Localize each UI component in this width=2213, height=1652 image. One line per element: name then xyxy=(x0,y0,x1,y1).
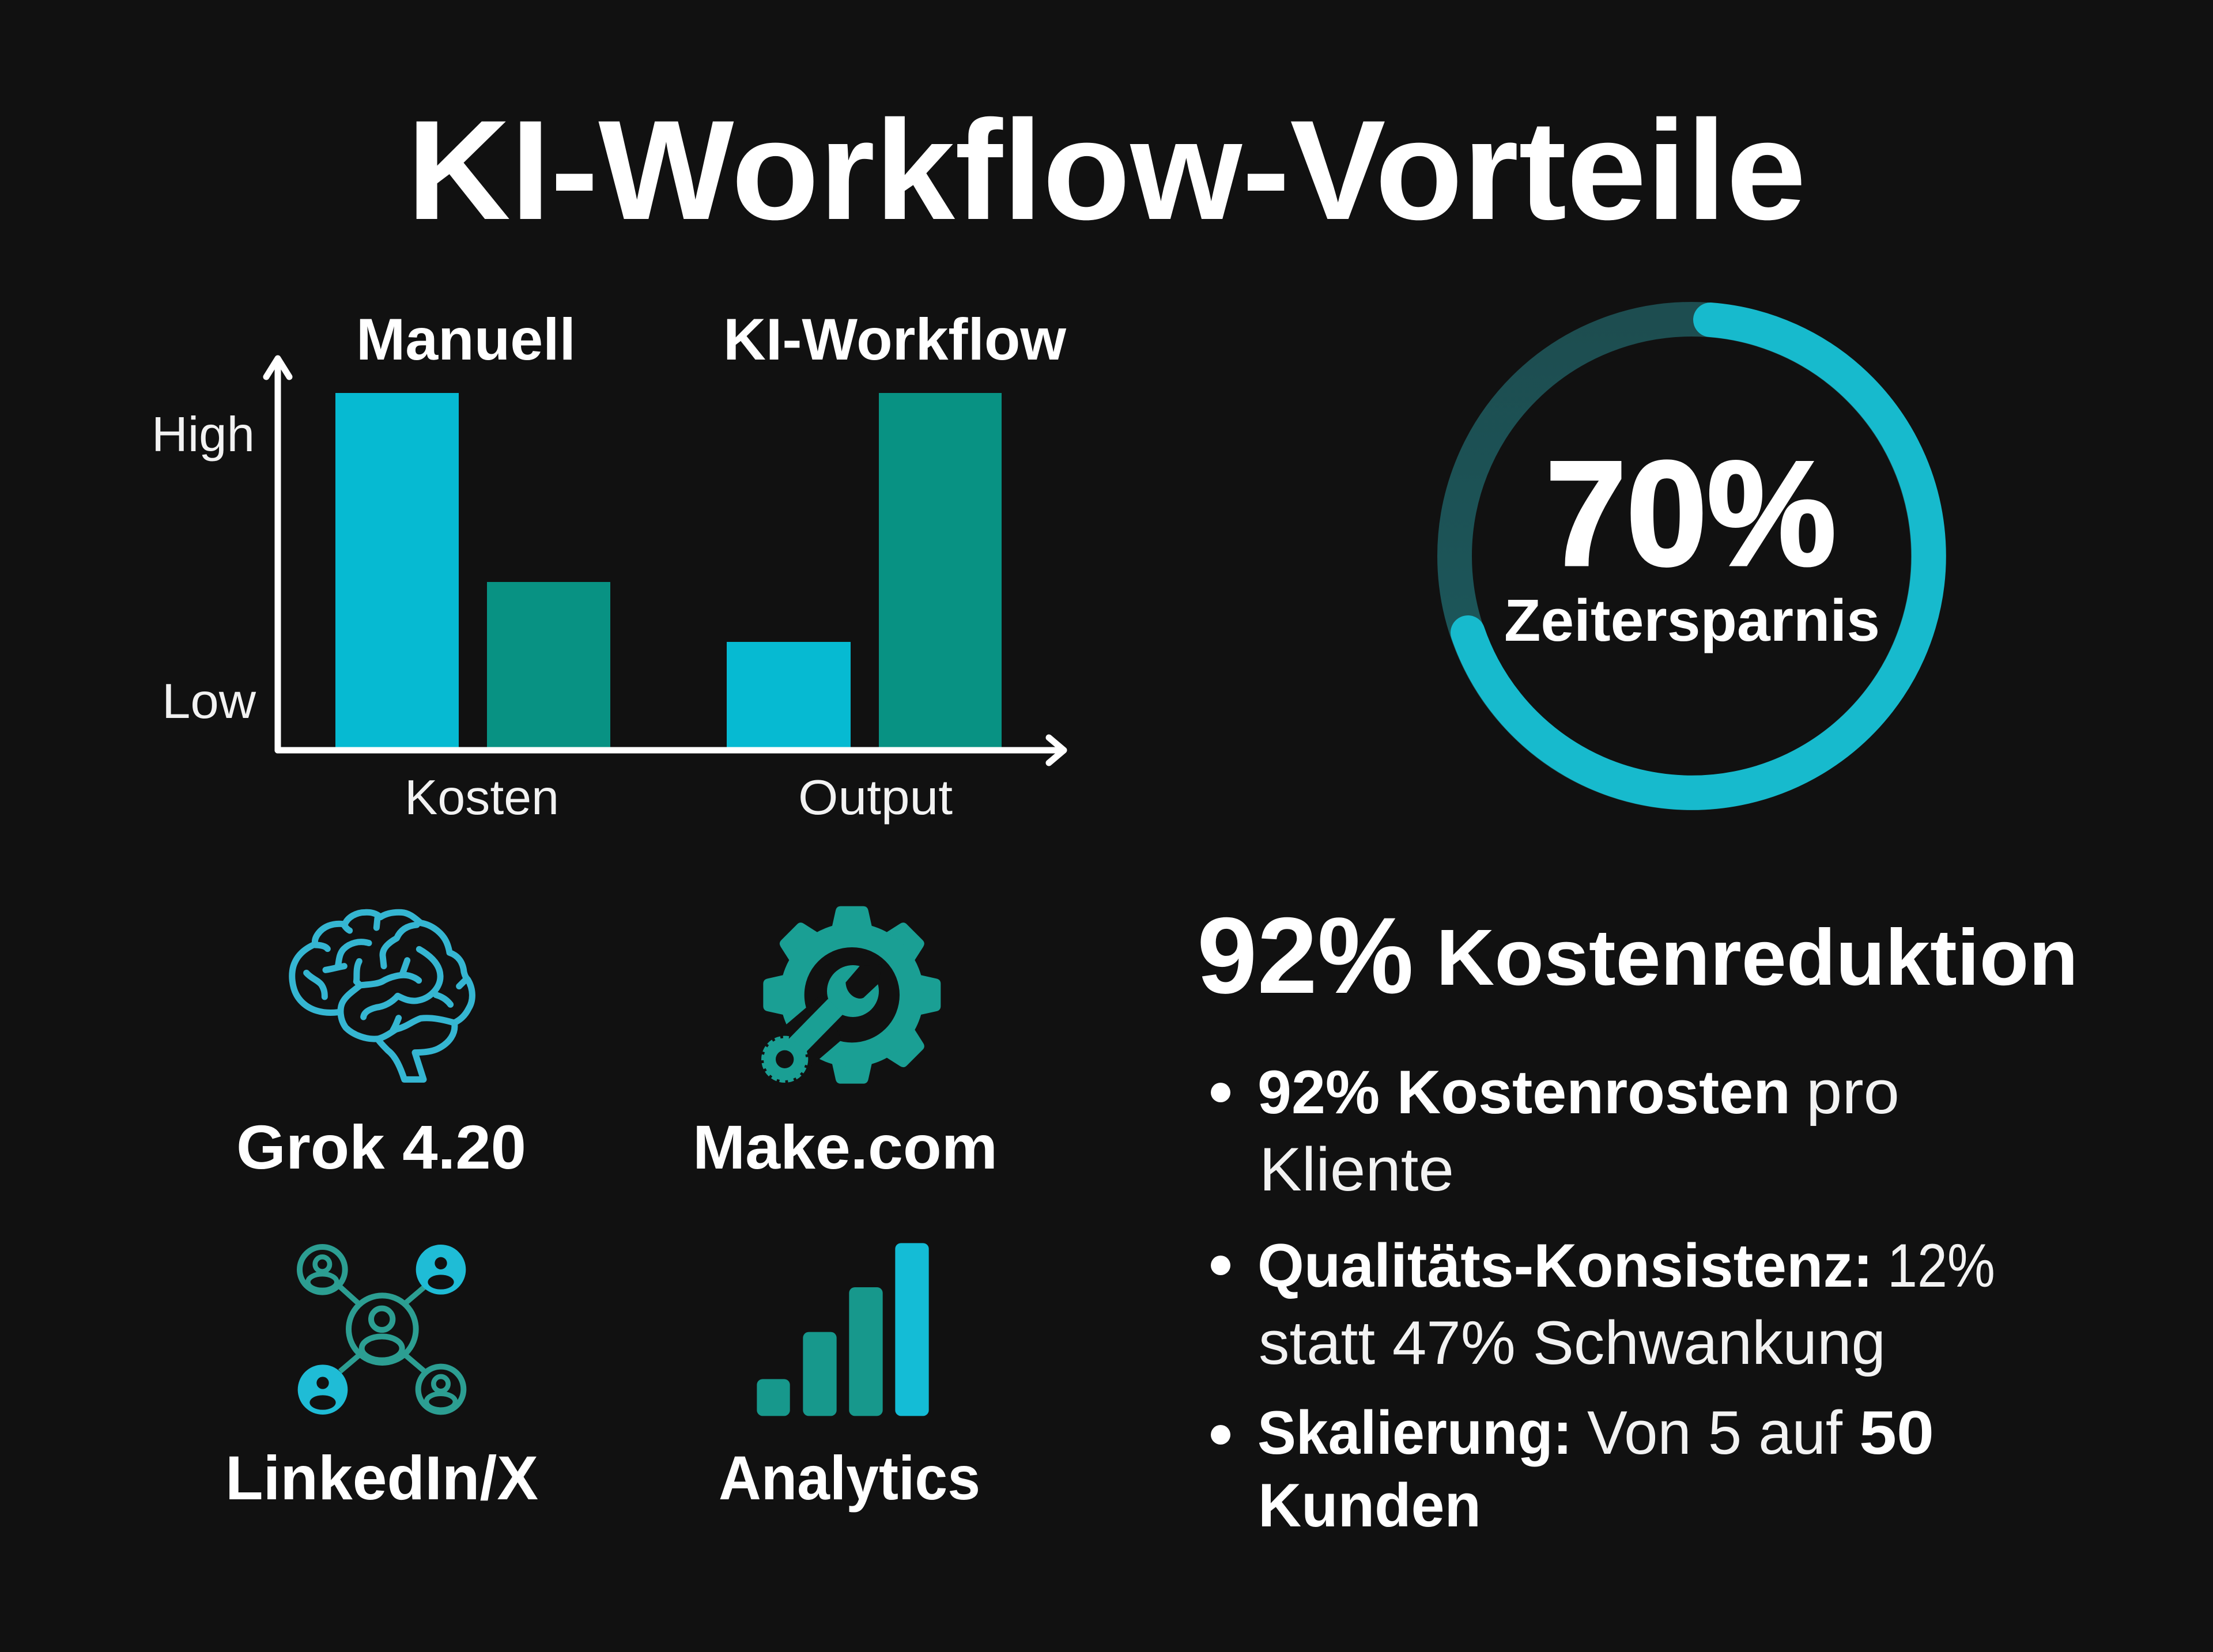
panel: cost reduction xyxy=(1197,895,2078,1540)
icon: people network xyxy=(298,1245,466,1415)
bullet two: statt 47% Schwankung xyxy=(1259,1308,1886,1377)
y-axis label: High: High xyxy=(152,407,255,462)
panel: bar chart comparing Manuell and KI-Workflow xyxy=(152,307,1067,825)
label: LinkedIn/X: LinkedIn/X xyxy=(225,1443,538,1513)
gauge label: Zeitersparnis xyxy=(1504,587,1880,653)
x-axis label: Output: Output xyxy=(798,770,953,825)
icon: brain xyxy=(292,912,472,1079)
gauge progress arc xyxy=(1468,320,1929,793)
bullet three: Kunden xyxy=(1258,1470,1481,1540)
tool: Grok 4.20 xyxy=(236,912,526,1182)
heading value: 92%: 92% xyxy=(1197,895,1414,1016)
label: Grok 4.20: Grok 4.20 xyxy=(236,1112,526,1182)
arrow: x axis xyxy=(278,738,1064,763)
bullet three: 50 xyxy=(1859,1398,1934,1467)
bar: Manuell cost xyxy=(335,393,459,749)
bar: Manuell output xyxy=(487,582,610,749)
series heading: Manuell: Manuell xyxy=(356,307,576,372)
label: Make.com: Make.com xyxy=(693,1112,998,1182)
panel: donut gauge 70% xyxy=(1455,319,1929,793)
bullet two: 12% xyxy=(1887,1231,1995,1300)
label: Analytics: Analytics xyxy=(719,1443,980,1513)
bullet one: Kliente xyxy=(1259,1135,1454,1204)
bullet three xyxy=(1211,1398,1934,1540)
heading text: Kostenreduktion: Kostenreduktion xyxy=(1436,913,2078,1002)
x-axis label: Kosten: Kosten xyxy=(405,770,559,825)
icon: gear with wrench xyxy=(763,906,941,1084)
icon: rising bars xyxy=(757,1243,929,1416)
title: KI-Workflow-Vorteile xyxy=(407,91,1806,249)
bullet one: pro xyxy=(1806,1057,1899,1126)
bullet one xyxy=(1211,1057,1899,1204)
bullet three: Von 5 auf xyxy=(1587,1398,1842,1467)
bullet three: Skalierung: xyxy=(1257,1398,1572,1467)
bullet one: 92% Kostenrosten xyxy=(1257,1057,1791,1126)
bullet two xyxy=(1211,1231,1995,1377)
bullet two: Qualitäts-Konsistenz: xyxy=(1257,1231,1873,1300)
tool: Analytics xyxy=(719,1243,980,1513)
gauge track xyxy=(1455,319,1928,793)
y-axis label: Low: Low xyxy=(162,674,256,729)
bar: KI-Workflow output xyxy=(879,393,1002,749)
gauge value: 70% xyxy=(1546,430,1836,596)
bar: KI-Workflow cost xyxy=(727,642,851,749)
tool: Make.com xyxy=(693,906,998,1182)
series heading: KI-Workflow: KI-Workflow xyxy=(723,307,1067,372)
arrow: y axis xyxy=(266,358,289,750)
tool: LinkedIn/X xyxy=(225,1245,538,1513)
